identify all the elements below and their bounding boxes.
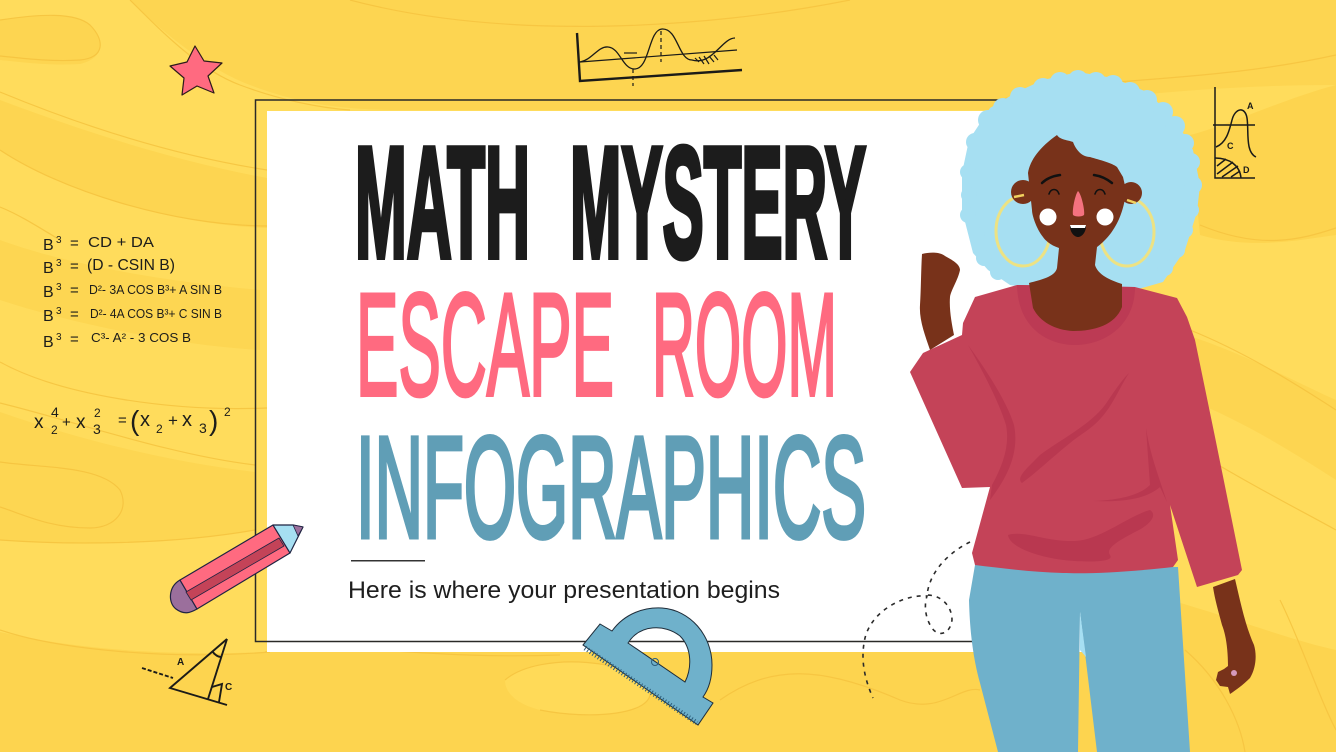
lower arm and hand — [1213, 579, 1256, 694]
title: Math Mystery: MATH — [355, 115, 530, 291]
text: trigonometry formulas: = — [70, 235, 79, 252]
text: algebra equation: x — [34, 412, 44, 433]
text: algebra equation: x — [182, 409, 192, 431]
icon: triangle with labels — [142, 639, 232, 705]
icon: pencil — [170, 525, 303, 613]
text: algebra equation: 2 — [224, 405, 231, 419]
icon: dashed loop doodle — [863, 542, 970, 698]
text: trigonometry formulas: B — [43, 334, 54, 351]
icon: star — [170, 46, 222, 95]
title: Escape Room: ESCAPE — [356, 263, 614, 426]
text: trigonometry formulas: D²- 3A COS B³+ A SIN B — [89, 282, 222, 297]
text: algebra equation: ) — [209, 405, 218, 436]
text: algebra equation: 3 — [199, 420, 207, 436]
text: trigonometry formulas: B — [43, 308, 54, 325]
text: algebra equation: x — [76, 412, 86, 433]
text: algebra equation: + — [168, 411, 178, 430]
text: trigonometry formulas — [43, 234, 222, 351]
subtitle: Here is where your presentation begins — [348, 577, 780, 604]
text: trigonometry formulas: B — [43, 237, 54, 254]
text: algebra equation: 2 — [94, 406, 101, 420]
text: algebra equation: 2 — [156, 422, 163, 436]
text: trigonometry formulas: (D - CSIN B) — [87, 257, 175, 274]
nose — [1073, 191, 1084, 216]
icon: function graph top — [577, 29, 742, 86]
icon: triangle with labels: A — [177, 657, 184, 668]
face and neck — [1011, 135, 1142, 331]
text: trigonometry formulas: 3 — [56, 306, 62, 317]
sweater — [910, 285, 1242, 587]
text: trigonometry formulas: 3 — [56, 332, 62, 343]
text: trigonometry formulas: C³- A² - 3 COS B — [91, 330, 191, 345]
text: algebra equation: 4 — [51, 404, 59, 420]
text: algebra equation: + — [62, 414, 71, 431]
text: trigonometry formulas: B — [43, 260, 54, 277]
icon: triangle with labels: C — [225, 682, 232, 693]
text: trigonometry formulas: CD + DA — [88, 234, 154, 251]
icon: function graph right: D — [1243, 165, 1250, 175]
text: ROOM — [652, 263, 837, 426]
text: trigonometry formulas: = — [70, 331, 79, 348]
text: trigonometry formulas: D²- 4A COS B³+ C SIN B — [90, 306, 222, 321]
cheeks — [1040, 208, 1056, 226]
text: trigonometry formulas: = — [70, 282, 79, 299]
text: trigonometry formulas: 3 — [56, 258, 62, 269]
text: trigonometry formulas: = — [70, 306, 79, 323]
illustration: woman character — [910, 70, 1256, 752]
icon: function graph right — [1213, 87, 1256, 178]
icon: protractor — [583, 608, 713, 725]
legs — [969, 565, 1190, 752]
text: algebra equation: = — [118, 412, 127, 429]
earrings — [996, 196, 1154, 266]
raised arm — [920, 253, 960, 350]
icon: function graph right: C — [1227, 141, 1234, 151]
text: trigonometry formulas: B — [43, 284, 54, 301]
hair — [960, 70, 1202, 300]
text: trigonometry formulas: = — [70, 258, 79, 275]
earring tops — [1014, 195, 1136, 203]
text: algebra equation: 2 — [51, 423, 58, 437]
text: algebra equation — [34, 404, 231, 437]
eyes and brows — [1042, 175, 1112, 194]
text: MYSTERY — [570, 115, 866, 291]
text: trigonometry formulas: 3 — [56, 235, 62, 246]
panel: white title card — [267, 111, 1085, 652]
icon: function graph right: A — [1247, 101, 1254, 111]
text: trigonometry formulas: 3 — [56, 282, 62, 293]
text: algebra equation: ( — [130, 405, 140, 436]
panel outline frame — [256, 100, 1005, 642]
text: algebra equation: x — [140, 409, 150, 431]
mouth — [1070, 226, 1086, 237]
divider under title — [351, 560, 425, 562]
text: algebra equation: 3 — [93, 421, 101, 437]
